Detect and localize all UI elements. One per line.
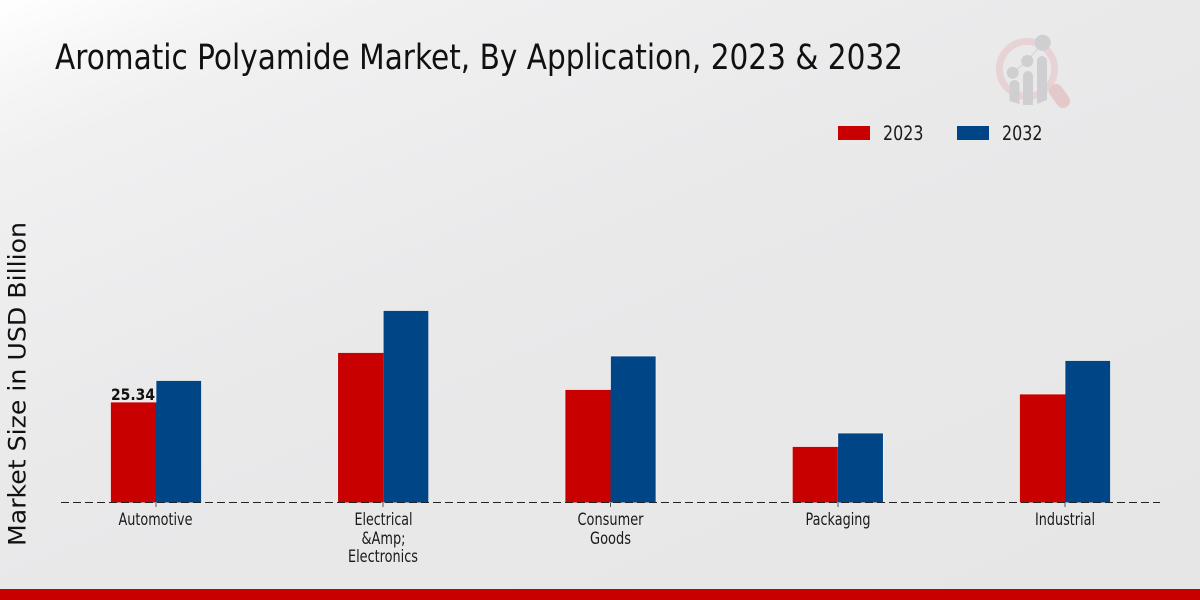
legend item: 2023 <box>838 122 924 145</box>
watermark logo icon <box>1000 35 1063 105</box>
label: Consumer Goods: Goods <box>590 529 631 548</box>
legend <box>838 122 1042 145</box>
legend item: 2032: 2032 <box>1002 122 1042 145</box>
footer bar <box>0 589 1200 600</box>
label: Consumer Goods <box>578 510 644 548</box>
y axis label: Market Size in USD Billion <box>4 222 32 546</box>
group: Consumer Goods <box>565 356 656 502</box>
legend item: 2032 <box>957 122 1042 145</box>
bar chart <box>110 310 1110 502</box>
label: Consumer Goods: Consumer <box>578 510 644 529</box>
title: Aromatic Polyamide Market, By Application, 2023 & 2032 <box>55 38 903 78</box>
data label: 25.34 <box>111 385 155 404</box>
group: Packaging <box>792 433 883 502</box>
label: Electrical & Electronics: &Amp; <box>362 529 406 548</box>
label: Electrical & Electronics: Electronics <box>348 547 418 566</box>
group: Electrical & Electronics <box>338 310 429 502</box>
label: Electrical & Electronics <box>348 510 418 566</box>
x axis labels <box>118 510 1095 566</box>
legend item: 2023: 2023 <box>883 122 924 145</box>
label: Industrial: Industrial <box>1035 510 1095 529</box>
group: Automotive <box>110 380 202 502</box>
label: Automotive: Automotive <box>118 510 192 529</box>
x axis baseline <box>61 502 1160 507</box>
label: Packaging: Packaging <box>806 510 870 529</box>
label: Electrical & Electronics: Electrical <box>354 510 412 529</box>
group: Industrial <box>1020 360 1110 502</box>
